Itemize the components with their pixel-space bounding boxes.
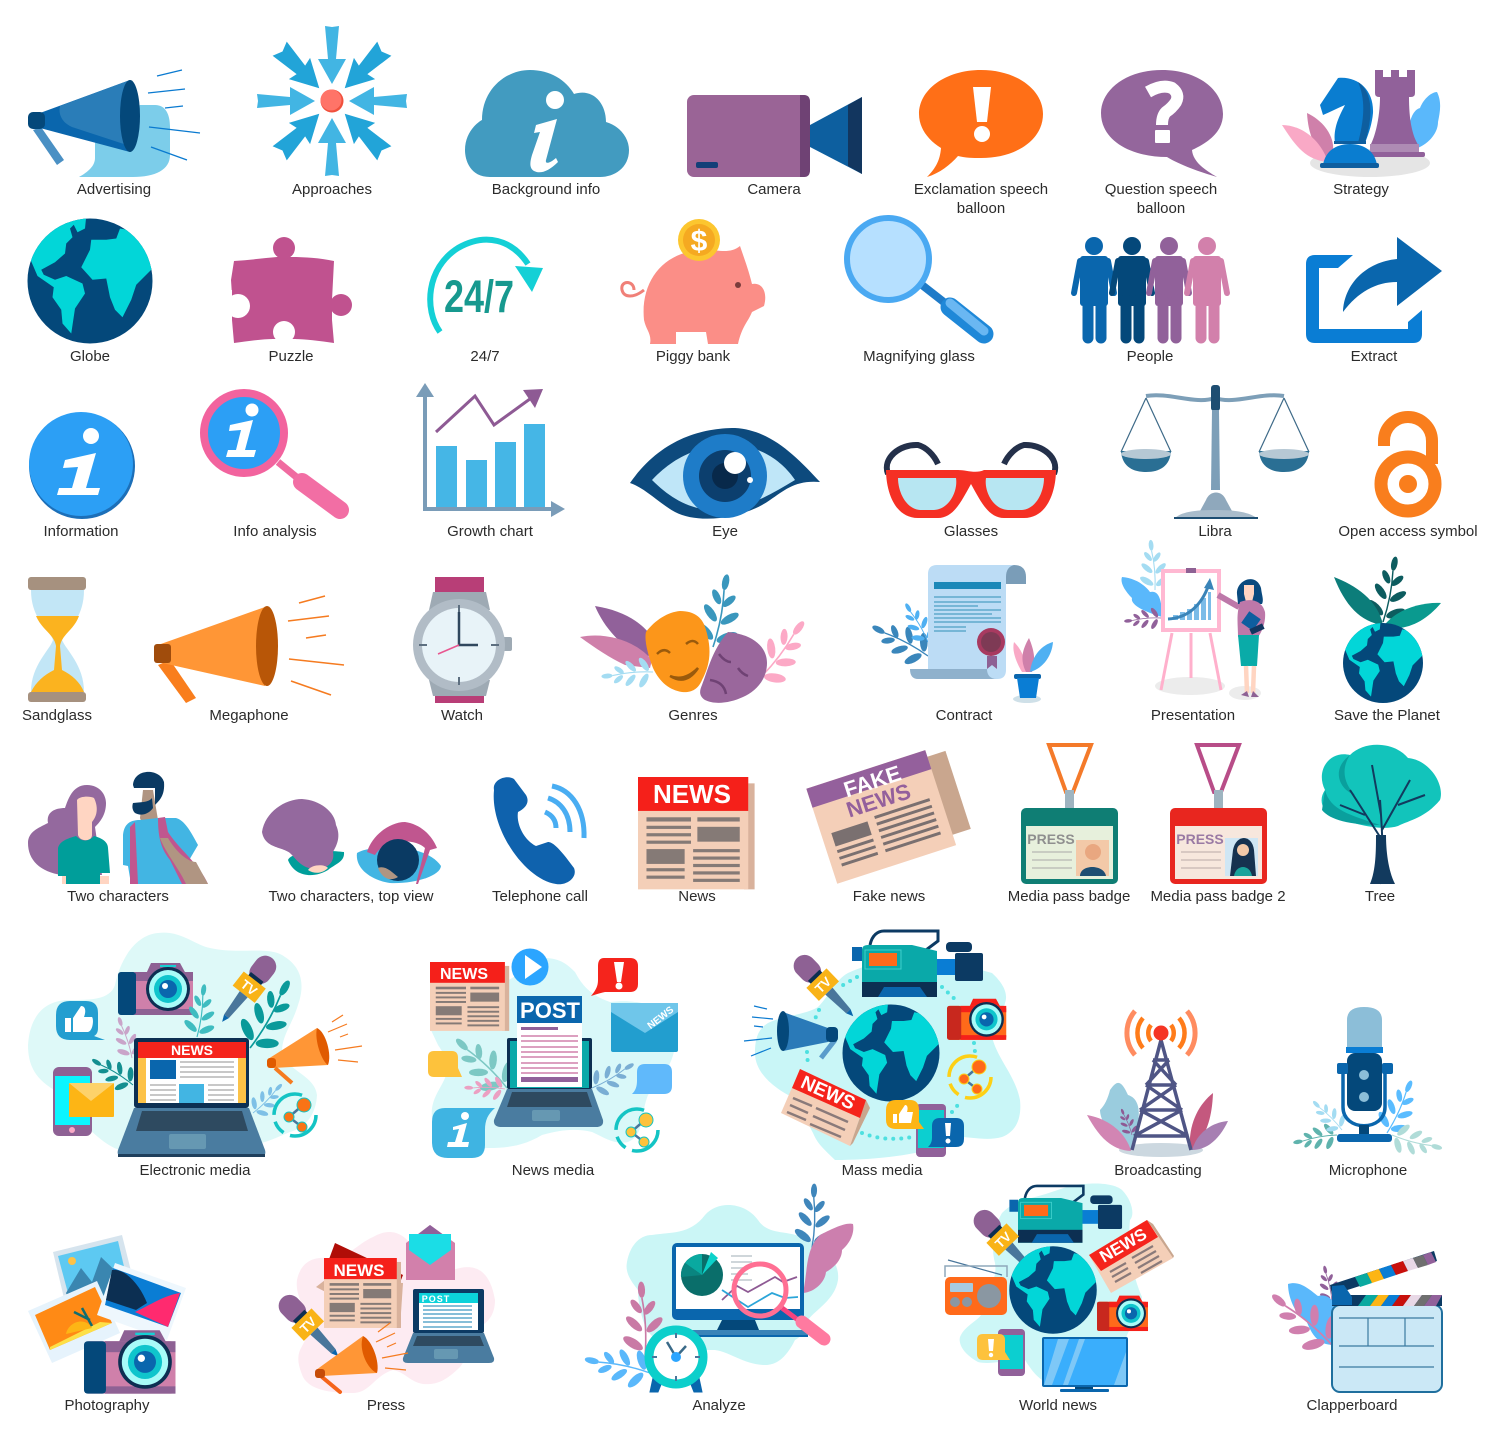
label: Tree: Tree — [1365, 888, 1395, 905]
icon: background info cloud — [465, 70, 629, 177]
label: Information: Information — [43, 523, 119, 540]
label: Background info: Background info — [492, 181, 600, 198]
label: Clapperboard: Clapperboard — [1307, 1397, 1397, 1414]
label: Globe: Globe — [70, 348, 110, 365]
label: Media pass badge: Media pass badge — [1008, 888, 1130, 905]
icon: fake news paper: FAKE — [841, 761, 904, 802]
label: World news: World news — [1019, 1397, 1097, 1414]
label: Info analysis: Info analysis — [233, 523, 317, 540]
label: Magnifying glass: Magnifying glass — [863, 348, 975, 365]
label: Open access symbol: Open access symbol — [1338, 523, 1478, 540]
illustration: news media: NEWS — [440, 966, 488, 983]
icon: news paper — [638, 777, 755, 889]
icon: globe — [15, 206, 165, 344]
label: News media: News media — [512, 1162, 595, 1179]
icon: media pass badge: PRESS — [1027, 831, 1075, 847]
icon: libra scales — [1121, 385, 1309, 519]
icon: telephone call — [494, 777, 584, 884]
icon: piggy bank: $ — [691, 225, 708, 258]
label: Camera: Camera — [747, 181, 801, 198]
illustration: press: POST — [422, 1294, 450, 1304]
label: Presentation: Presentation — [1151, 707, 1235, 724]
icon: fake news paper — [806, 744, 974, 884]
label: News: News — [678, 888, 716, 905]
icon: presentation woman with easel — [1121, 538, 1265, 700]
illustration: press — [272, 1225, 495, 1393]
label: Growth chart: Growth chart — [447, 523, 534, 540]
icon: 24/7 clock arrow: 24/7 — [444, 271, 514, 322]
icon: extract share arrow — [1306, 237, 1442, 343]
icon: people group — [1074, 237, 1227, 338]
icon: question speech balloon — [1101, 70, 1223, 177]
icon: save the planet — [1334, 553, 1441, 703]
label: Sandglass: Sandglass — [22, 707, 92, 724]
icon: media pass badge — [1021, 745, 1118, 884]
label: Mass media: Mass media — [842, 1162, 923, 1179]
icon: contract scroll — [863, 565, 1053, 703]
illustration: press: NEWS — [334, 1261, 384, 1280]
label: Electronic media: Electronic media — [140, 1162, 251, 1179]
label: Strategy: Strategy — [1333, 181, 1389, 198]
label: Telephone call: Telephone call — [492, 888, 588, 905]
illustration: news media: NEWS — [646, 1004, 676, 1032]
icon: broadcasting tower — [1087, 1011, 1228, 1157]
label: Exclamation speech balloon: balloon — [957, 200, 1005, 217]
laptop with news site: NEWS — [171, 1042, 213, 1058]
illustration: mass media — [744, 931, 1020, 1160]
icon: orange megaphone — [154, 596, 344, 703]
label: Extract: Extract — [1351, 348, 1398, 365]
icon: genres theatre masks — [580, 570, 822, 703]
icon: exclamation speech balloon — [919, 70, 1043, 177]
icon: 24/7 clock arrow — [430, 240, 543, 332]
label: Genres: Genres — [668, 707, 718, 724]
illustration: world news: TV — [992, 1229, 1014, 1251]
illustration: electronic media: TV — [238, 977, 260, 999]
icon: information circle — [29, 412, 135, 519]
clapper arm and stripes — [1330, 1251, 1442, 1306]
illustration: world news — [945, 1183, 1174, 1392]
label: Media pass badge 2: Media pass badge 2 — [1150, 888, 1286, 905]
radio — [945, 1260, 1007, 1315]
icon: photography — [28, 1235, 186, 1394]
megaphone — [744, 1006, 838, 1058]
label: Megaphone: Megaphone — [209, 707, 289, 724]
label: Eye: Eye — [712, 523, 738, 540]
label: Puzzle: Puzzle — [268, 348, 314, 365]
label: Photography: Photography — [64, 1397, 150, 1414]
icon: clapperboard — [1257, 1251, 1442, 1392]
icon: info analysis magnifier — [204, 393, 340, 510]
label: Exclamation speech balloon: Exclamation speech — [914, 181, 1048, 198]
label: Two characters, top view: Two characters, top view — [268, 888, 434, 905]
label: Broadcasting: Broadcasting — [1114, 1162, 1202, 1179]
icon: media pass badge 2: PRESS — [1176, 831, 1224, 847]
label: Question speech balloon: balloon — [1137, 200, 1185, 217]
illustration: world news: NEWS — [1096, 1224, 1150, 1266]
illustration: press: TV — [297, 1314, 319, 1336]
icon: piggy bank — [622, 219, 765, 344]
illustration: analyze — [581, 1183, 853, 1393]
label: Advertising: Advertising — [77, 181, 151, 198]
monitor with charts — [672, 1243, 808, 1337]
label: Glasses: Glasses — [944, 523, 998, 540]
icon: glasses — [886, 445, 1056, 518]
label: Fake news: Fake news — [853, 888, 925, 905]
label: Analyze: Analyze — [692, 1397, 746, 1414]
label: Watch: Watch — [441, 707, 483, 724]
icon: puzzle piece — [224, 237, 352, 345]
icon: two characters — [28, 772, 208, 884]
icon: magnifying glass — [847, 218, 984, 334]
icon: fake news paper: NEWS — [843, 778, 914, 823]
icon: wristwatch — [413, 577, 512, 703]
icon: advertising megaphone — [28, 70, 200, 177]
label: Microphone: Microphone — [1329, 1162, 1407, 1179]
illustration: news media — [428, 948, 678, 1158]
label: Two characters: Two characters — [67, 888, 169, 905]
label: Press: Press — [367, 1397, 405, 1414]
icon: two characters top view — [262, 799, 441, 884]
icon: media pass badge 2 — [1170, 745, 1267, 884]
icon: growth chart — [416, 383, 565, 517]
label: Approaches: Approaches — [292, 181, 372, 198]
illustration: mass media: NEWS — [797, 1072, 858, 1115]
icon: open access symbol — [1381, 417, 1435, 511]
icon: video camera — [687, 95, 862, 177]
laptop with post: POST — [520, 998, 581, 1023]
icon: sandglass — [28, 577, 86, 702]
icon: tree — [1322, 745, 1441, 884]
icon: eye — [630, 428, 820, 519]
label: Libra: Libra — [1198, 523, 1232, 540]
icon: strategy chess pieces — [1282, 70, 1440, 177]
label: Save the Planet: Save the Planet — [1334, 707, 1441, 724]
icon: news paper: NEWS — [653, 779, 731, 809]
label: Contract: Contract — [936, 707, 993, 724]
icon: approaches arrows — [257, 26, 407, 176]
label: People: People — [1127, 348, 1173, 365]
icon: microphone — [1291, 1007, 1446, 1164]
illustration: electronic media — [28, 933, 362, 1157]
label: 24/7: 24/7 — [470, 348, 500, 365]
label: Piggy bank: Piggy bank — [656, 348, 731, 365]
laptop with news site — [118, 1038, 265, 1157]
illustration: mass media: TV — [812, 974, 834, 996]
label: Question speech balloon: Question speech — [1105, 181, 1217, 198]
laptop with post — [494, 996, 603, 1127]
